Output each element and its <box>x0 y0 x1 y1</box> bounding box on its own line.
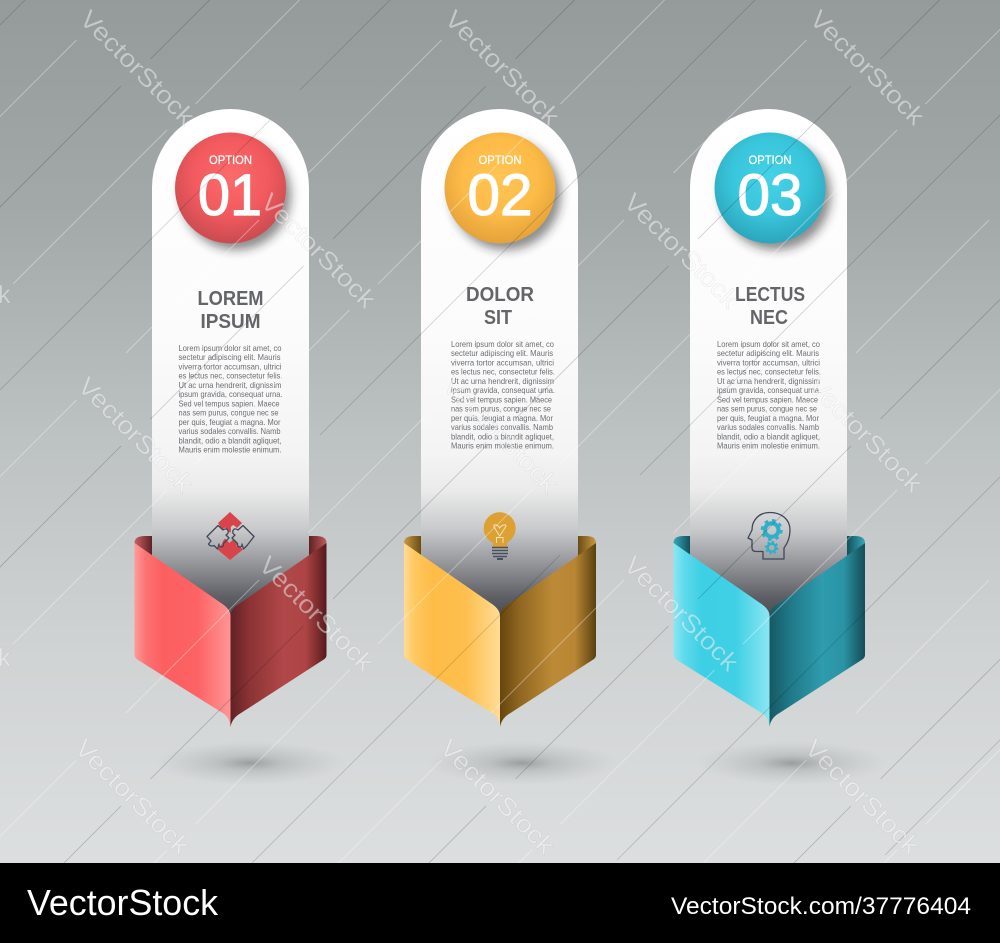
badge 1: 01 <box>198 163 262 228</box>
watermarks: VectorStock <box>253 551 379 677</box>
ribbon left face 3 <box>674 543 770 727</box>
ground shadow: option 3 <box>696 741 888 785</box>
body text 1: ipsum gravida, consequat urna. <box>178 390 282 399</box>
watermarks: VectorStock <box>255 188 381 314</box>
panel: option 3 <box>674 109 865 727</box>
watermarks: VectorStock <box>72 372 198 498</box>
body text 3: Ut ac urna hendrerit, dignissim <box>717 377 820 386</box>
body text 2: es lectus nec, consectetur felis. <box>451 368 555 376</box>
body text 3: per quis, feugiat a magna. Mor <box>717 414 819 423</box>
badge 2: OPTION <box>478 153 522 167</box>
badge 3 <box>714 132 831 250</box>
body text 1: varius sodales convallis. Namb <box>178 427 281 436</box>
ribbon right face 2 <box>500 543 596 727</box>
body text 3: Mauris enim molestie enimum. <box>717 442 820 450</box>
heading 1: IPSUM <box>200 311 260 333</box>
watermarks: VectorStock <box>74 5 200 131</box>
body text 3: varius sodales convallis. Namb <box>717 423 819 432</box>
watermarks: VectorStock <box>799 734 925 860</box>
heading 3: LECTUS <box>735 284 805 306</box>
heading 2: SIT <box>484 307 512 329</box>
watermarks: VectorStock <box>802 372 928 498</box>
badge 1 <box>175 132 291 250</box>
watermarks: VectorStock <box>69 734 195 860</box>
watermarks: VectorStock <box>618 551 744 677</box>
body text 1: Ut ac urna hendrerit, dignissim <box>178 381 282 390</box>
heading 1 <box>198 288 264 333</box>
panel: option 1 <box>134 109 326 727</box>
body text 1: viverra tortor accumsan, ultrici <box>178 362 282 372</box>
body text 3: Sed vel tempus sapien. Maece <box>717 395 818 404</box>
body text 2: varius sodales convallis. Namb <box>451 423 553 432</box>
body text 1: sectetur adipiscing elit. Mauris <box>178 353 280 362</box>
icon: light bulb <box>484 512 516 560</box>
watermarks: VectorStock <box>434 734 560 860</box>
footer url: VectorStock.com/37776404 <box>671 893 971 920</box>
body text 2: sectetur adipiscing elit. Mauris <box>451 349 553 358</box>
body text 2: Mauris enim molestie enimum. <box>451 442 554 450</box>
icon: puzzle <box>207 512 254 560</box>
watermarks: VectorStock <box>437 372 563 498</box>
body text 2 <box>451 340 555 450</box>
body text 1: blandit, odio a blandit agliquet, <box>178 436 282 446</box>
body text 3: blandit, odio a blandit agliquet, <box>717 432 820 441</box>
footer bar <box>0 863 1000 943</box>
heading 2 <box>466 284 535 329</box>
ribbon right face 1 <box>230 543 326 727</box>
watermarks: VectorStock <box>618 188 744 314</box>
body text 3 <box>717 340 821 450</box>
body text 3: es lectus nec, consectetur felis. <box>717 368 821 376</box>
body text 2: Lorem ipsum dolor sit amet, co <box>451 340 554 349</box>
pillar 1 <box>152 109 309 620</box>
badge 1: OPTION <box>209 153 252 167</box>
ground shadow: option 2 <box>426 741 618 785</box>
body text 2: Sed vel tempus sapien. Maece <box>451 395 552 404</box>
watermarks: VectorStock <box>439 5 565 131</box>
body text 1: Mauris enim molestie enimum. <box>178 446 282 455</box>
body text 1: es lectus nec, consectetur felis. <box>178 372 282 381</box>
badge 2 <box>444 132 561 250</box>
body text 2: Ut ac urna hendrerit, dignissim <box>451 377 554 386</box>
body text 3: nas sem purus, congue nec se <box>717 404 817 414</box>
body text 3: viverra tortor accumsan, ultrici <box>717 358 820 367</box>
body text 2: viverra tortor accumsan, ultrici <box>451 358 554 367</box>
pillar 2 <box>421 109 578 620</box>
heading 3 <box>735 284 805 329</box>
body text 2: nas sem purus, congue nec se <box>451 404 551 414</box>
ribbon back flaps 3 <box>674 536 865 556</box>
badge 3: OPTION <box>748 153 792 167</box>
footer logo: VectorStock <box>27 882 219 923</box>
heading 1: LOREM <box>198 288 264 310</box>
body text 2: blandit, odio a blandit agliquet, <box>451 432 554 441</box>
body text 3: sectetur adipiscing elit. Mauris <box>717 349 819 358</box>
body text 1: Sed vel tempus sapien. Maece <box>178 400 280 408</box>
body text 2: per quis, feugiat a magna. Mor <box>451 414 553 423</box>
watermarks: VectorStock <box>804 5 930 131</box>
heading 3: NEC <box>750 307 788 329</box>
ribbon right face 3 <box>770 543 865 727</box>
body text 3: ipsum gravida, consequat urna. <box>717 386 821 395</box>
body text 1 <box>178 344 282 455</box>
body text 1: per quis, feugiat a magna. Mor <box>178 418 281 427</box>
ribbon left face 1 <box>134 543 230 727</box>
icon: head with gears <box>748 512 790 559</box>
ribbon back flaps 2 <box>404 536 596 556</box>
panel: option 2 <box>404 109 596 727</box>
badge 2: 02 <box>468 163 532 228</box>
body text 1: nas sem purus, congue nec se <box>178 409 279 418</box>
badge 3: 03 <box>738 163 802 228</box>
pillar 3 <box>690 109 847 620</box>
body text 2: ipsum gravida, consequat urna. <box>451 386 555 395</box>
body text 1: Lorem ipsum dolor sit amet, co <box>178 344 282 353</box>
heading 2: DOLOR <box>466 284 535 306</box>
ground shadow: option 1 <box>154 741 346 785</box>
ribbon back flaps 1 <box>134 536 326 556</box>
body text 3: Lorem ipsum dolor sit amet, co <box>717 340 820 349</box>
ribbon left face 2 <box>404 543 500 727</box>
